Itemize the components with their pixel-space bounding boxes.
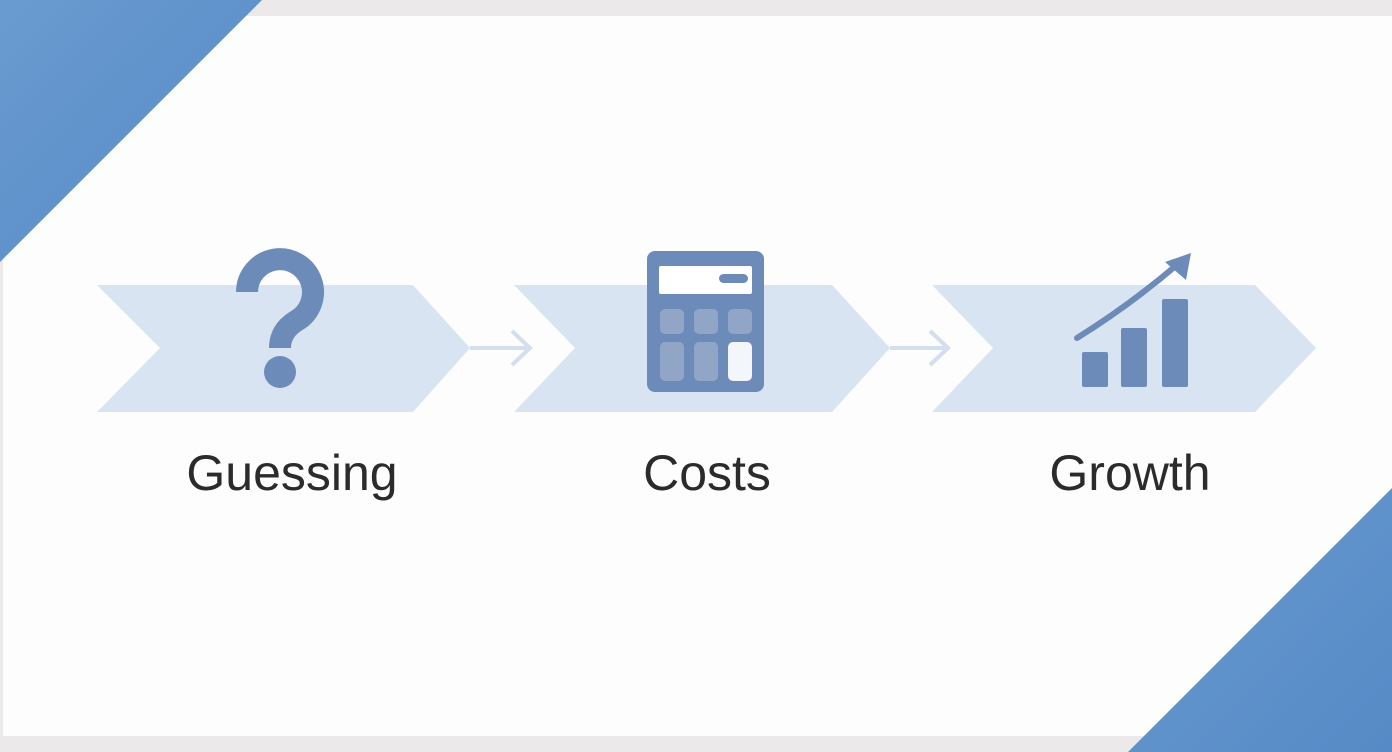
chevron 3	[932, 285, 1316, 412]
chevron 1	[97, 285, 470, 412]
arrow 2	[890, 331, 948, 365]
icon: growth chart	[1077, 253, 1191, 387]
label: Growth: Growth	[1049, 445, 1211, 501]
label: Costs: Costs	[643, 445, 771, 501]
corner: bottom-right triangle	[1128, 488, 1392, 752]
chevron 2	[514, 285, 890, 412]
corner: top-left triangle	[0, 0, 262, 262]
arrow 1	[470, 331, 530, 365]
icon: question mark	[247, 259, 313, 388]
icon: calculator	[647, 251, 764, 392]
label: Guessing: Guessing	[186, 445, 398, 501]
